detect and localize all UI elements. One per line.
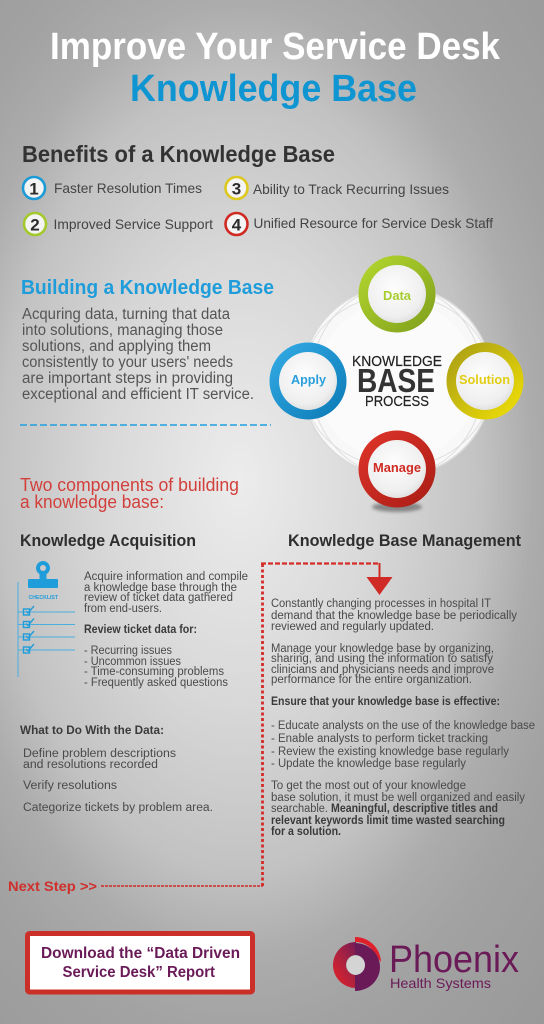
benefit 1: 1	[29, 180, 39, 198]
text block: acquisition intro	[84, 571, 248, 689]
text block: management: Meaningful, descriptive titles and	[331, 803, 498, 815]
text block: management: - Enable analysts to perform ticket tracking	[271, 733, 488, 745]
centre label	[352, 353, 442, 410]
arrow: next step connector	[101, 563, 392, 886]
text block: acquisition intro: - Time-consuming problems	[84, 666, 224, 678]
text block: what to do with the data: What to Do With the Data:	[20, 725, 164, 737]
heading: two components: a knowledge base:	[20, 492, 164, 512]
text block: building intro: consistently to your users' needs	[22, 354, 233, 371]
text block: management: reviewed and regularly updated.	[271, 621, 434, 633]
panel: benefits list	[23, 177, 493, 235]
text block: management: Manage your knowledge base by organizing,	[271, 643, 494, 655]
node: data: Data	[383, 288, 412, 303]
node: data	[358, 256, 436, 332]
text block: what to do with the data: Categorize tickets by problem area.	[23, 802, 213, 814]
centre label: PROCESS	[365, 393, 429, 410]
text block: management: for a solution.	[271, 826, 341, 838]
text block: what to do with the data: Verify resolutions	[23, 780, 117, 792]
logo mark	[333, 937, 381, 991]
text block: management: demand that the knowledge base be periodically	[271, 610, 517, 622]
text block: building intro: solutions, and applying them	[22, 338, 211, 355]
text block: acquisition intro: - Frequently asked questions	[84, 677, 228, 689]
heading: knowledge base management: Knowledge Base Management	[288, 531, 521, 550]
text block: management: base solution, it must be well organized and easily	[271, 792, 525, 804]
text block: management: performance for the entire organization.	[271, 674, 472, 686]
text block: what to do with the data	[20, 725, 213, 814]
benefit 4: 4	[232, 216, 242, 234]
benefit 4	[226, 213, 493, 235]
text block: what to do with the data: and resolutions recorded	[23, 759, 158, 771]
benefit 4: Unified Resource for Service Desk Staff	[254, 215, 493, 231]
title: Improve Your Service Desk	[50, 26, 501, 68]
heading: building a knowledge base: Building a Knowledge Base	[21, 277, 274, 299]
node: solution: Solution	[459, 372, 510, 387]
centre label: BASE	[357, 362, 435, 399]
benefit 2: Improved Service Support	[54, 216, 213, 232]
label: next step: Next Step >>	[8, 878, 97, 894]
logo: phoenix health systems: Health Systems	[390, 975, 491, 991]
node: apply	[270, 342, 346, 420]
text block: management	[271, 598, 535, 838]
text block: management: Ensure that your knowledge base is effective:	[271, 696, 500, 708]
title	[50, 26, 501, 110]
text block: management: clinicians and physicians needs and improve	[271, 664, 494, 676]
button: download report: Download the “Data Driven	[41, 945, 240, 962]
text block: management: - Review the existing knowledge base regularly	[271, 746, 509, 758]
button: download report: Service Desk” Report	[62, 964, 216, 981]
text block: acquisition intro: review of ticket data gathered	[84, 592, 233, 604]
text block: building intro: exceptional and efficient IT service.	[22, 386, 254, 403]
icon: checklist	[18, 561, 75, 677]
benefit 3: Ability to Track Recurring Issues	[253, 181, 449, 197]
benefit 1: Faster Resolution Times	[54, 180, 202, 196]
text block: acquisition intro: Acquire information and compile	[84, 571, 248, 583]
text block: acquisition intro: from end-users.	[84, 603, 162, 615]
icon: checklist: CHECKLIST	[28, 595, 58, 601]
button: download report	[28, 934, 252, 992]
text block: management: searchable.	[271, 803, 328, 815]
benefit 1	[23, 177, 202, 199]
heading: benefits: Benefits of a Knowledge Base	[22, 141, 335, 167]
heading: two components	[20, 475, 239, 512]
text block: acquisition intro: a knowledge base through the	[84, 582, 237, 594]
node: manage: Manage	[373, 460, 421, 475]
text block: building intro	[22, 306, 254, 403]
text block: building intro: Acquring data, turning that data	[22, 306, 230, 323]
title: Knowledge Base	[130, 68, 417, 110]
benefit 2: 2	[30, 216, 40, 234]
node: solution	[446, 342, 524, 420]
text block: acquisition intro: - Recurring issues	[84, 645, 172, 657]
text block: acquisition intro: - Uncommon issues	[84, 656, 181, 668]
text block: building intro: are important steps in providing	[22, 370, 233, 387]
text block: building intro: into solutions, managing those	[22, 322, 223, 339]
text block: management: relevant keywords limit time wasted searching	[271, 815, 505, 827]
text block: what to do with the data: Define problem descriptions	[23, 748, 176, 760]
text block: management: - Update the knowledge base regularly	[271, 758, 466, 770]
text block: management: - Educate analysts on the use of the knowledge base	[271, 720, 535, 732]
node: manage	[358, 430, 436, 512]
text block: management: sharing, and using the information to satisfy	[271, 653, 493, 665]
logo: phoenix health systems: Phoenix	[389, 939, 519, 981]
logo: phoenix health systems	[333, 937, 519, 991]
heading: two components: Two components of building	[20, 475, 239, 495]
diagram: knowledge base process	[270, 256, 524, 512]
benefit 2	[24, 213, 213, 235]
benefit 3: 3	[232, 180, 241, 198]
text block: management: Constantly changing processes in hospital IT	[271, 598, 491, 610]
central disc	[302, 286, 492, 476]
benefit 3	[226, 177, 449, 199]
text block: management: To get the most out of your knowledge	[271, 780, 466, 792]
text block: acquisition intro: Review ticket data for:	[84, 624, 197, 636]
centre label: KNOWLEDGE	[352, 353, 442, 370]
node: apply: Apply	[291, 372, 327, 387]
heading: knowledge acquisition: Knowledge Acquisition	[20, 531, 196, 550]
